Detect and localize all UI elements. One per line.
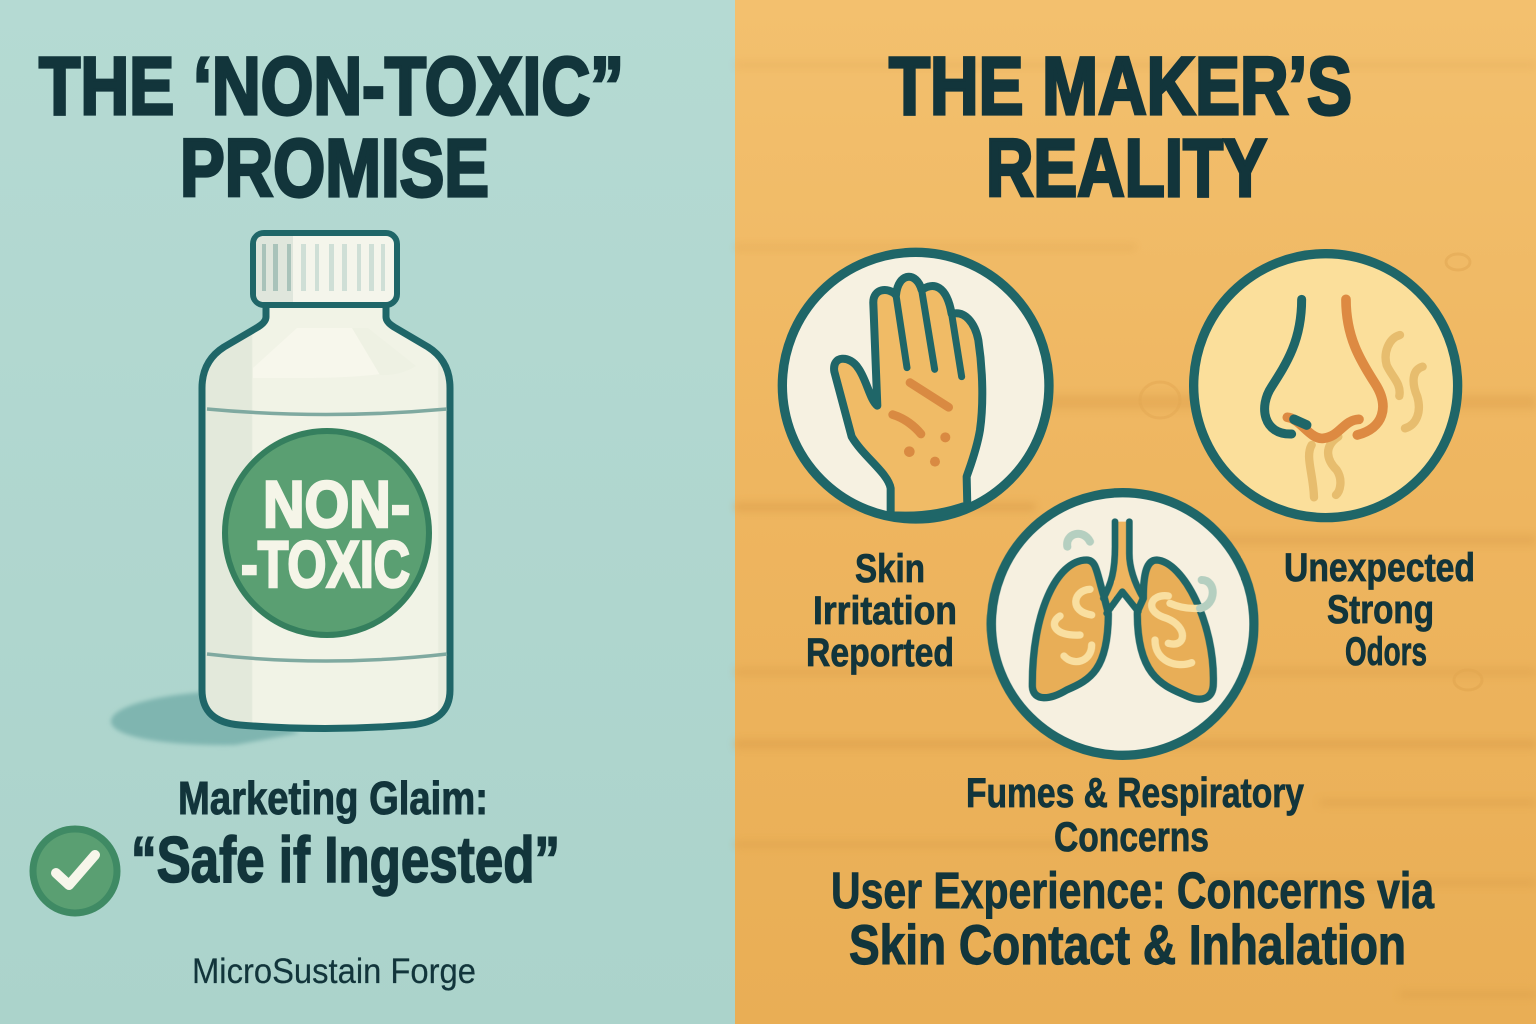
bottle cap <box>253 233 397 305</box>
text: marketing claim: Marketing Glaim: <box>178 772 488 824</box>
panel: the maker's reality <box>735 0 1536 1024</box>
brand: microsustain forge: MicroSustain Forge <box>192 952 476 991</box>
title: the maker's reality: REALITY <box>986 123 1267 214</box>
label: fumes and respiratory concerns: Fumes & Respiratory <box>966 769 1305 816</box>
label badge: non-toxic: NON- <box>263 467 410 541</box>
icon: lungs with fumes <box>991 493 1254 755</box>
label badge: non-toxic: -TOXIC <box>241 527 410 601</box>
icon: bottle <box>202 233 450 728</box>
label: skin irritation reported: Skin <box>855 547 925 591</box>
label: unexpected strong odors: Unexpected <box>1284 546 1475 590</box>
label: skin irritation reported: Irritation <box>813 589 957 633</box>
title: the non-toxic promise: PROMISE <box>180 123 489 214</box>
bottle shadow <box>111 692 300 745</box>
label: unexpected strong odors: Odors <box>1345 630 1427 674</box>
panel: the non-toxic promise <box>0 0 735 1024</box>
title: the non-toxic promise: THE ‘NON-TOXIC” <box>39 41 624 132</box>
icon: check mark <box>33 829 117 913</box>
label: unexpected strong odors <box>1284 546 1475 674</box>
title: the maker's reality: THE MAKER’S <box>889 41 1352 132</box>
text: marketing claim <box>131 772 560 896</box>
label: unexpected strong odors: Strong <box>1327 588 1434 632</box>
label: skin irritation reported <box>806 547 957 675</box>
icon: nose with odors <box>1194 254 1458 518</box>
title: the non-toxic promise <box>39 41 624 214</box>
text: marketing claim: “Safe if Ingested” <box>131 823 560 896</box>
label: fumes and respiratory concerns <box>966 769 1305 860</box>
label: fumes and respiratory concerns: Concerns <box>1054 813 1209 860</box>
title: the maker's reality <box>889 41 1352 214</box>
text: user experience summary: Skin Contact & Inhalation <box>849 913 1406 976</box>
text: user experience summary <box>831 862 1435 976</box>
label badge: non-toxic <box>225 431 429 635</box>
icon: irritated hand <box>782 252 1049 519</box>
label: skin irritation reported: Reported <box>806 631 954 675</box>
